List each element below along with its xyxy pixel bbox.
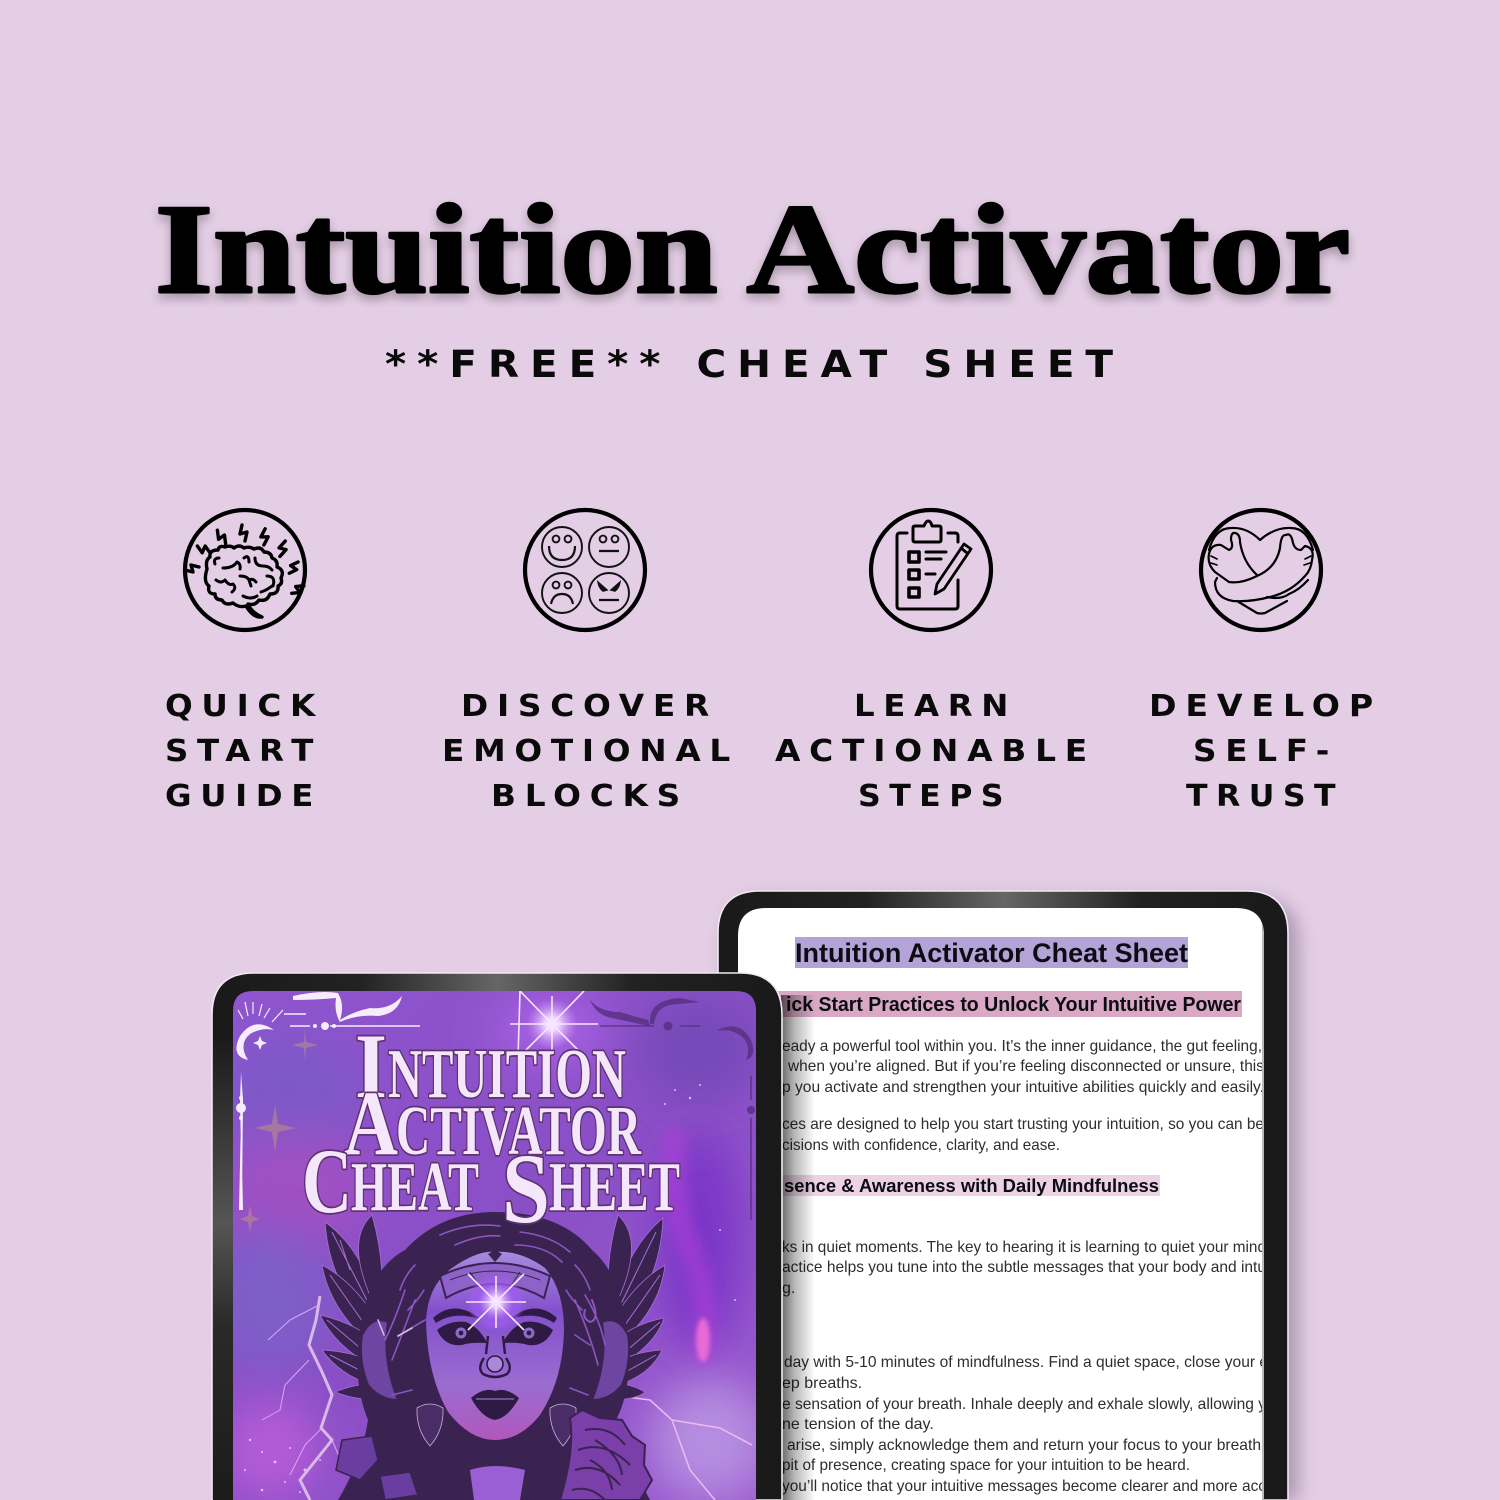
cover title: CTIVATOR: [396, 1093, 642, 1170]
cover background: [210, 990, 770, 1500]
left flower: [336, 1436, 418, 1500]
practice steps: ep breaths.: [782, 1375, 862, 1392]
intro paragraph: [782, 1038, 1264, 1154]
practice steps: arise, simply acknowledge them and return your focus to your breath: [787, 1437, 1261, 1454]
headband: [440, 1250, 550, 1298]
face: [426, 1252, 564, 1440]
title: Intuition Activator: [155, 178, 1350, 320]
side rosettes: [361, 1320, 629, 1400]
label: develop self-trust: DEVELOP: [1149, 689, 1382, 724]
third eye star: [466, 1274, 526, 1330]
cover title: A: [344, 1072, 398, 1174]
rose: [560, 1410, 652, 1500]
icon: brain with lightning: [185, 510, 306, 630]
moon ornament right: [590, 998, 755, 1220]
label: quick start guide: [165, 689, 324, 814]
top star: [510, 991, 598, 1050]
icon: checklist clipboard and pencil: [871, 510, 991, 630]
mindfulness paragraph: actice helps you tune into the subtle messages that your body and intu: [782, 1259, 1266, 1276]
cover title: [304, 1034, 680, 1225]
label: develop self-trust: SELF-: [1193, 734, 1338, 769]
speckles: [244, 1084, 736, 1493]
tablet: cheat sheet document: [718, 891, 1298, 1500]
shadow of front tablet: [781, 995, 815, 1500]
section heading: ick Start Practices to Unlock Your Intuitive Power: [786, 994, 1241, 1016]
brows and eyes: [433, 1308, 557, 1345]
hair strands: [378, 1225, 605, 1395]
label: discover emotional blocks: DISCOVER: [461, 689, 718, 724]
label: develop self-trust: TRUST: [1186, 779, 1344, 814]
intro paragraph: when you’re aligned. But if you’re feeling disconnected or unsure, this: [787, 1058, 1264, 1075]
lightning right: [631, 1397, 752, 1500]
label: learn actionable steps: STEPS: [858, 779, 1012, 814]
earrings: [417, 1404, 576, 1446]
label: learn actionable steps: ACTIONABLE: [775, 734, 1096, 769]
lips: [471, 1390, 519, 1420]
faint gold stars: [240, 1030, 318, 1232]
document page content: [778, 908, 1268, 1500]
cover title: C: [302, 1130, 352, 1232]
subtitle: **FREE** CHEAT SHEET: [385, 343, 1124, 386]
cover title: NTUITION: [388, 1036, 626, 1113]
intro paragraph: eady a powerful tool within you. It’s the inner guidance, the gut feeling,: [782, 1038, 1262, 1055]
mindfulness heading: sence & Awareness with Daily Mindfulness: [784, 1176, 1159, 1196]
practice steps: day with 5-10 minutes of mindfulness. Find a quiet space, close your e: [784, 1354, 1268, 1371]
angry face: [589, 573, 629, 613]
practice steps: ne tension of the day.: [782, 1416, 934, 1433]
happy face: [542, 527, 582, 567]
label: quick start guide: QUICK: [165, 689, 324, 724]
icon: four mood faces: [525, 510, 645, 630]
mindfulness paragraph: g.: [782, 1280, 795, 1297]
label: discover emotional blocks: [442, 689, 739, 814]
intro paragraph: p you activate and strengthen your intuitive abilities quickly and easily.: [782, 1079, 1264, 1096]
mindfulness paragraph: ks in quiet moments. The key to hearing it is learning to quiet your mind: [782, 1239, 1266, 1256]
practice steps: e sensation of your breath. Inhale deeply and exhale slowly, allowing y: [782, 1396, 1266, 1413]
neck: [470, 1466, 525, 1500]
label: develop self-trust: [1149, 689, 1382, 814]
cover title: I: [355, 1015, 387, 1117]
mindfulness paragraph: [782, 1239, 1266, 1297]
label: quick start guide: START: [165, 734, 322, 769]
label: quick start guide: GUIDE: [165, 779, 322, 814]
label: learn actionable steps: LEARN: [854, 689, 1017, 724]
title: Intuition Activator: [155, 183, 1350, 325]
document title: Intuition Activator Cheat Sheet: [795, 938, 1188, 968]
intro paragraph: ces are designed to help you start trusting your intuition, so you can be: [782, 1116, 1264, 1133]
hair mass: [338, 1212, 650, 1500]
lightning left: [262, 1296, 345, 1500]
practice steps: pit of presence, creating space for your intuition to be heard.: [782, 1457, 1190, 1474]
illustrated woman: [320, 1212, 665, 1500]
cover title: HEET: [549, 1149, 680, 1226]
intro paragraph: cisions with confidence, clarity, and ease.: [782, 1137, 1060, 1154]
label: discover emotional blocks: EMOTIONAL: [442, 734, 739, 769]
practice steps: you’ll notice that your intuitive messages become clearer and more acc: [782, 1478, 1266, 1495]
left feathers: [320, 1214, 406, 1399]
sad face: [542, 573, 582, 613]
cover title: S: [502, 1133, 550, 1244]
neutral face: [589, 527, 629, 567]
nose: [480, 1336, 510, 1377]
tablet: cover artwork: [210, 973, 782, 1500]
right feathers: [608, 1214, 666, 1400]
moon ornament left: [236, 992, 420, 1060]
label: learn actionable steps: [775, 689, 1096, 814]
practice steps: [782, 1354, 1268, 1495]
cover title: HEAT: [351, 1149, 479, 1226]
icon: self-hug heart: [1201, 510, 1321, 630]
label: discover emotional blocks: BLOCKS: [491, 779, 689, 814]
side ornament left: [236, 1072, 246, 1210]
cover screen: [210, 990, 770, 1500]
